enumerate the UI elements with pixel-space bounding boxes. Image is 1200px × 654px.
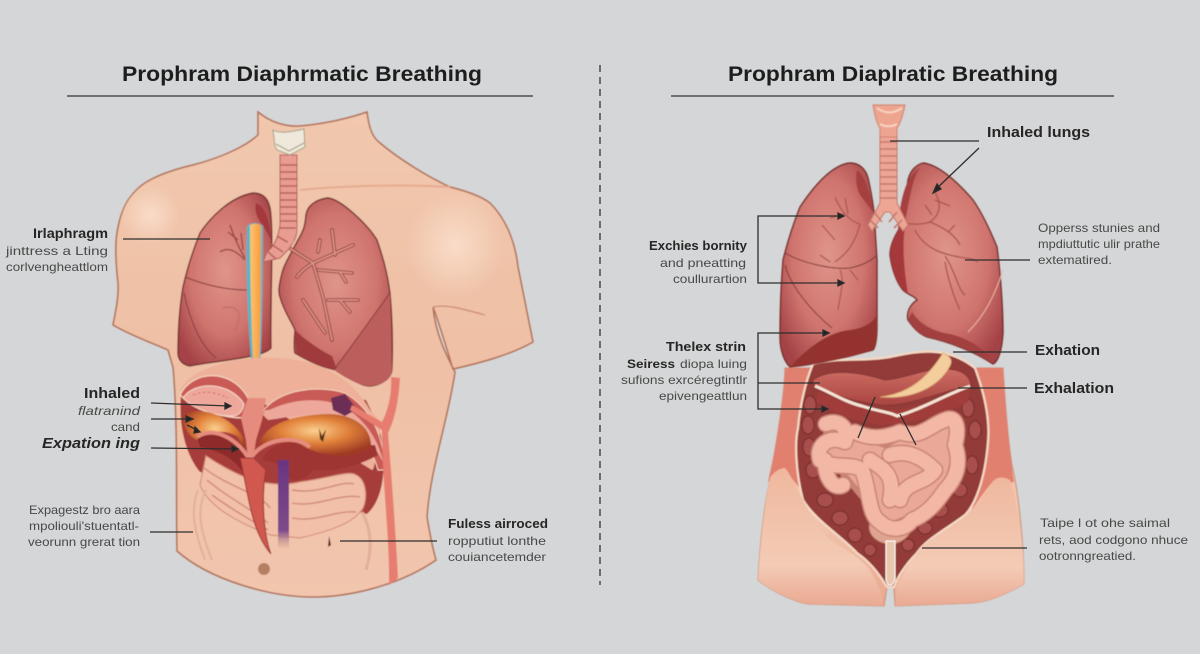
callout: exchanges note: and pneatting	[660, 256, 746, 270]
callout: lower right note: rets, aod codgono nhuce	[1039, 533, 1188, 547]
callout: expansion note: mpoliouli'stuentatl-	[29, 519, 139, 533]
callout: inhaled: flatranind	[78, 404, 140, 418]
callout: inhaled: Expation ing	[42, 436, 140, 452]
navel	[258, 563, 270, 575]
laryngeal cartilage	[873, 105, 905, 137]
stomach band	[813, 353, 971, 425]
torso body	[113, 112, 533, 597]
callout: expansion note	[28, 503, 140, 549]
left diaphragm lobe	[180, 376, 250, 418]
callout: inhaled: Inhaled	[84, 385, 140, 402]
callout: thelex note: Thelex strin	[666, 340, 746, 354]
callout: thelex note: sufions exrcéregtintlr	[621, 373, 747, 387]
callout: opposes note	[1038, 221, 1160, 267]
dark band under right liver	[262, 443, 378, 480]
right liver	[258, 414, 371, 456]
shoulder shading	[120, 185, 503, 315]
purple patch	[331, 394, 357, 416]
callout: exhation: Exhation	[1035, 343, 1100, 359]
panel: torso anatomy	[113, 112, 533, 597]
abdomen skin	[758, 368, 1024, 606]
callout: fullness note: couiancetemder	[448, 550, 546, 564]
callout: lower right note: ootronngreatied.	[1039, 549, 1136, 563]
callout: lower right note: Taipe l ot ohe saimal	[1040, 516, 1170, 530]
right lung	[279, 198, 392, 386]
callout: opposes note: Opperss stunies and	[1038, 221, 1160, 235]
left panel title: Prophram Diaphrmatic Breathing	[122, 63, 482, 86]
purple vessel	[278, 460, 289, 548]
abdominal cavity	[180, 390, 384, 514]
callout: opposes note: extematired.	[1038, 253, 1112, 267]
left dark arch	[197, 433, 250, 485]
callout: thelex note: Seiress	[627, 357, 675, 371]
coral stripe	[350, 377, 400, 585]
callout: diaphragm: corlvengheattlom	[6, 260, 108, 274]
callout: lower right note	[1039, 516, 1188, 563]
callout: inhaled lungs: Inhaled lungs	[987, 124, 1090, 141]
right lung upper	[890, 163, 1003, 364]
callout: opposes note: mpdiuttutic ulir prathe	[1038, 237, 1160, 251]
central diaphragm strand	[197, 398, 310, 554]
callout: thelex note: diopa luing	[680, 357, 747, 371]
bladder	[869, 510, 911, 544]
callout: exchanges note: Exchies bornity	[649, 239, 747, 253]
right panel title: Prophram Diaplratic Breathing	[728, 63, 1058, 86]
left liver	[184, 411, 246, 455]
leader lines: left diagram	[123, 239, 437, 541]
small intestine	[819, 419, 958, 529]
right diaphragm band	[262, 389, 386, 470]
callout: expansion note: Expagestz bro aara	[29, 503, 140, 517]
callout: exhalation: Exhalation	[1034, 381, 1114, 397]
callout: fullness note: ropputiut lonthe	[448, 534, 546, 548]
callout: inhaled	[42, 385, 140, 452]
coral side bands	[768, 368, 1014, 510]
callout: thelex note: epivengeattlun	[659, 389, 747, 403]
callout: fullness note	[448, 516, 548, 564]
panel: lungs and abdomen anatomy	[758, 105, 1024, 606]
colon beads	[802, 396, 981, 556]
peritoneal cavity	[796, 352, 988, 587]
callout: fullness note: Fuless airroced	[448, 516, 548, 531]
callout: diaphragm: Irlaphragm	[33, 226, 108, 241]
upper trachea	[868, 123, 908, 231]
callout: diaphragm: jinttress a Lting	[5, 244, 108, 258]
callout: inhaled: cand	[111, 420, 140, 434]
left lung	[178, 193, 272, 366]
callout: thelex note	[621, 340, 747, 403]
trachea	[263, 155, 297, 262]
diaphragm dome	[180, 358, 384, 470]
thigh shading	[758, 468, 884, 606]
leader lines: right diagram	[758, 141, 1030, 548]
orange tube	[247, 223, 263, 396]
callout: diaphragm	[5, 226, 108, 274]
pelvic midline	[886, 541, 895, 585]
callout: exchanges note	[649, 239, 747, 286]
callout: exchanges note: coullurartion	[673, 272, 747, 286]
left lung upper	[780, 163, 877, 367]
callout: expansion note: veorunn grerat tion	[28, 535, 140, 549]
intestine folds	[194, 456, 370, 570]
thyroid cartilage	[273, 129, 305, 155]
